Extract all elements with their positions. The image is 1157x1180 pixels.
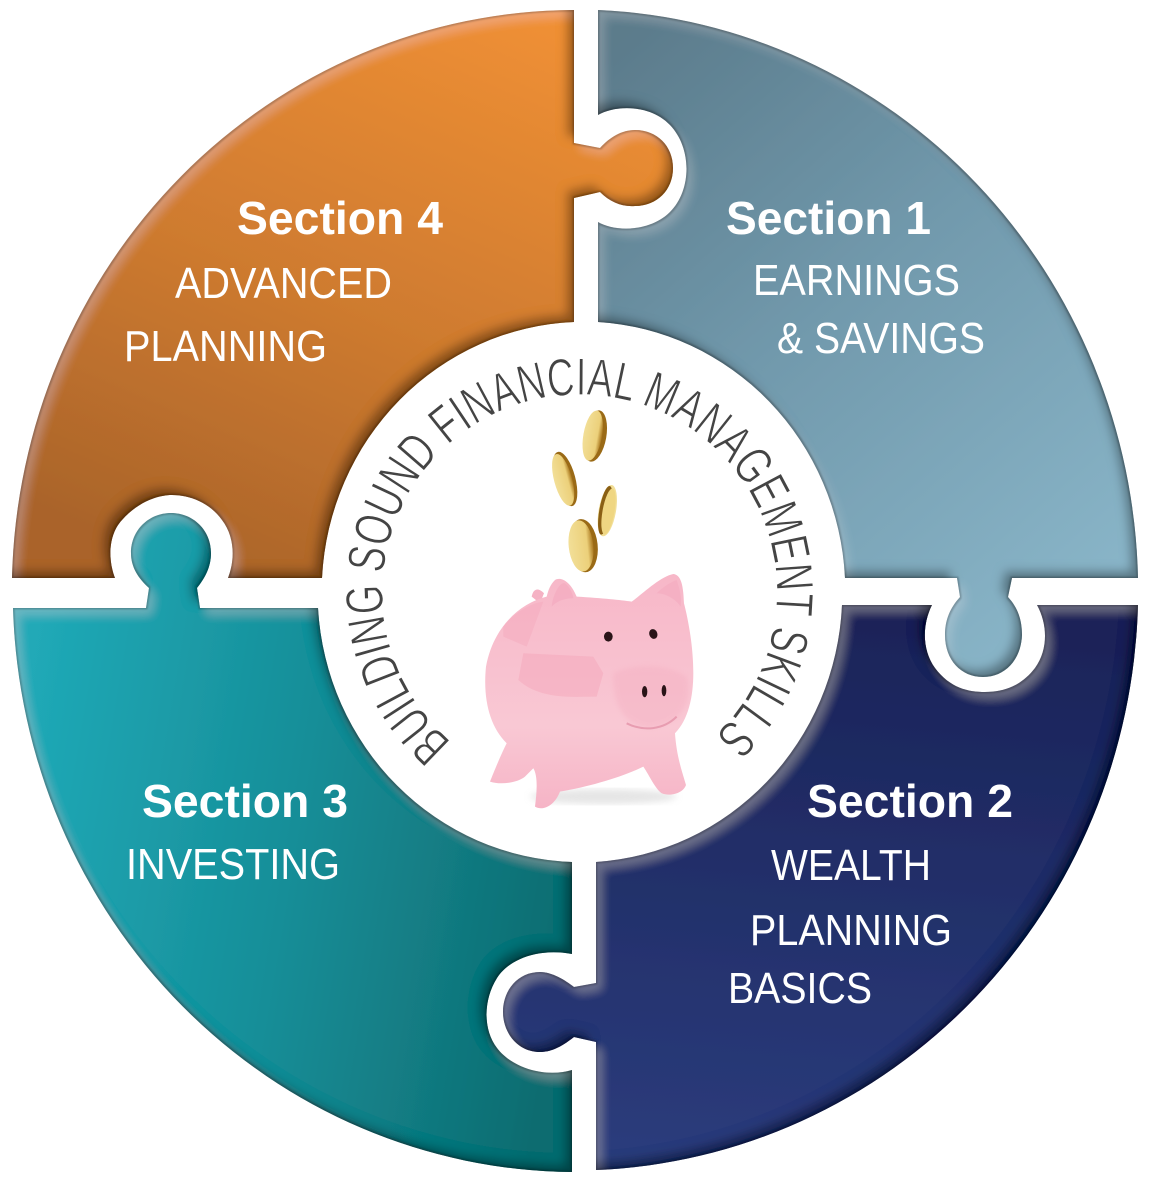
text: wealth planning basics: [728, 841, 952, 1013]
heading: section 4: Section 4: [237, 192, 443, 244]
heading: section 1: Section 1: [726, 192, 931, 244]
icon: falling gold coins: [547, 408, 620, 574]
text: earnings and savings: EARNINGS: [753, 256, 960, 305]
text: earnings and savings: [753, 256, 985, 363]
panel: section 2 puzzle piece: [503, 605, 1138, 1170]
text: earnings and savings: & SAVINGS: [777, 314, 985, 363]
panel: section 1 puzzle piece: [598, 10, 1138, 677]
panel: section 4 puzzle piece: [12, 10, 673, 578]
text: advanced planning: [124, 259, 392, 371]
text: wealth planning basics: WEALTH: [771, 841, 931, 890]
heading: section 3: Section 3: [142, 775, 348, 827]
text: wealth planning basics: BASICS: [728, 964, 872, 1013]
text: wealth planning basics: PLANNING: [750, 906, 952, 955]
curved title: BUILDING SOUND FINANCIAL MANAGEMENT SKILLS: [346, 359, 813, 766]
heading: section 2: Section 2: [807, 775, 1013, 827]
panel: section 3 puzzle piece: [13, 513, 572, 1172]
icon: piggy bank: [485, 574, 693, 808]
text: advanced planning: PLANNING: [124, 322, 327, 371]
text: investing: INVESTING: [126, 840, 340, 889]
text: advanced planning: ADVANCED: [175, 259, 392, 308]
